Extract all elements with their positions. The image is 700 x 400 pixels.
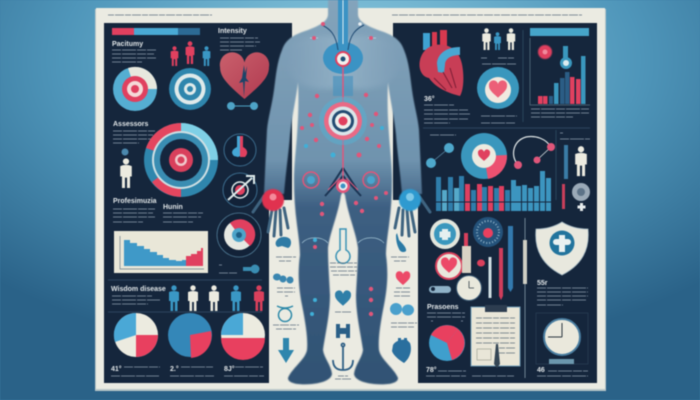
clipboard	[471, 305, 520, 368]
text block	[427, 313, 465, 321]
icon: blue anatomical heart	[392, 338, 411, 363]
pie chart one	[114, 313, 158, 357]
text block	[111, 367, 264, 376]
stethoscope loop	[514, 136, 555, 169]
panel: assessors	[113, 121, 257, 207]
text block	[220, 38, 260, 50]
caption	[277, 288, 295, 296]
icon: wall clock	[456, 276, 482, 300]
icon: radial dial	[473, 217, 503, 247]
panel: cream center icons	[330, 229, 357, 379]
fingers and thumbs	[253, 196, 430, 236]
caption	[391, 323, 417, 327]
icon: red heart	[396, 271, 410, 285]
icon: row of people	[169, 285, 264, 311]
shield	[536, 222, 588, 275]
stat: 55: 55r	[537, 280, 548, 287]
knee arcs	[302, 238, 384, 243]
icon: red pen	[499, 248, 503, 300]
target with heart and wedge	[461, 133, 507, 179]
heading: Profesimuzia: Profesimuzia	[113, 198, 157, 205]
icon: anchor	[333, 344, 353, 370]
icon: thermometer	[336, 229, 350, 263]
stat: 36: 36°	[424, 95, 435, 103]
icon: blue blobs	[390, 303, 414, 316]
thin medical bars	[562, 145, 568, 209]
caption	[335, 311, 351, 313]
stat: 78: 78°	[426, 366, 437, 374]
icon: blue heart	[335, 290, 351, 306]
target chart one	[113, 67, 157, 111]
body left half	[264, 0, 344, 384]
icon: gray dial	[572, 183, 590, 201]
body right half	[342, 0, 422, 384]
icon: down arrow	[278, 338, 294, 363]
human body figure	[253, 0, 430, 384]
caption	[335, 376, 351, 379]
icon: flask	[396, 233, 406, 252]
icon: small key	[243, 264, 260, 274]
red palm	[262, 189, 284, 211]
pie chart two	[168, 313, 212, 358]
abdomen target	[319, 97, 367, 145]
text block	[112, 50, 156, 62]
text block	[537, 371, 588, 376]
blue body markers	[304, 22, 384, 316]
icon: person and dot	[120, 148, 132, 188]
text block	[113, 209, 203, 222]
icon: ring	[277, 306, 293, 322]
stat: 2: 2.°	[170, 365, 179, 373]
caption	[391, 257, 409, 261]
central blue neck and chest	[310, 0, 376, 96]
text block	[531, 109, 589, 117]
connector with two dots	[227, 102, 258, 110]
icon: three people	[171, 41, 210, 66]
heading: Prasoens: Prasoens	[427, 304, 459, 311]
panel: right dark background	[393, 23, 597, 383]
icon: thermal shape in circle	[224, 134, 256, 166]
framed clock	[536, 313, 588, 364]
icon: bottle	[462, 233, 471, 273]
area bar chart	[114, 231, 208, 273]
heading: Wisdom disease: Wisdom disease	[111, 286, 166, 293]
heading: Hunin: Hunin	[163, 204, 183, 211]
bar chart	[530, 28, 590, 105]
chest target	[336, 52, 350, 66]
text block	[481, 116, 517, 123]
icon: blobs	[273, 274, 294, 284]
stat: 8: 8J°	[224, 365, 235, 373]
caption	[276, 257, 296, 261]
icon: long instrument	[523, 218, 527, 378]
icon: small key	[429, 286, 451, 293]
caption	[273, 325, 299, 329]
panel: left dark background	[104, 23, 292, 383]
groin and hip targets	[303, 172, 379, 193]
icon: red capsule	[477, 260, 485, 266]
panel: right middle network and bars	[423, 30, 590, 211]
progress bar	[112, 28, 200, 35]
text block	[560, 133, 590, 139]
text block	[424, 105, 470, 123]
target chart two	[169, 68, 211, 110]
panel: area chart section	[113, 198, 261, 274]
stat: 46: 46	[537, 367, 545, 374]
heading: Assessors: Assessors	[113, 121, 149, 128]
heading: Pacitumy: Pacitumy	[112, 41, 143, 48]
text block	[330, 263, 357, 275]
panel: upper right statistics	[419, 28, 590, 123]
large radial chart	[144, 123, 218, 197]
torso highlight	[287, 36, 399, 89]
icon: thin pen	[488, 257, 492, 298]
icon: three people	[482, 28, 515, 50]
text block	[481, 58, 516, 64]
stat: 41: 41°	[111, 365, 122, 373]
heading: Intensity: Intensity	[218, 28, 247, 35]
text block	[113, 131, 155, 143]
panel: wisdom disease	[108, 280, 265, 376]
red and blue body markers	[300, 22, 388, 316]
text block	[219, 265, 237, 273]
text block	[537, 288, 588, 305]
target with heart	[477, 67, 519, 109]
icon: heart ring	[436, 253, 462, 279]
panel: cream column icons left	[273, 237, 299, 363]
striped bar chart	[436, 171, 552, 211]
panel: lower right medical tools	[426, 217, 588, 378]
icon: arrow target circle	[223, 173, 257, 207]
icon: swirl circle	[217, 213, 261, 257]
panel: upper left statistics	[112, 28, 269, 111]
red central line	[342, 67, 344, 176]
text block	[112, 296, 160, 304]
icon: person	[575, 146, 587, 176]
network nodes	[426, 143, 454, 168]
pie chart three	[221, 313, 265, 360]
poster sheet	[95, 8, 606, 391]
lower abdomen branching lines	[325, 160, 361, 196]
icon: blue pen	[508, 226, 513, 292]
icon: cross in ring	[430, 219, 460, 249]
label	[430, 134, 456, 136]
text block	[426, 371, 514, 376]
icon: broken heart	[220, 52, 269, 99]
icon: puzzle	[336, 324, 350, 338]
pie chart	[429, 325, 465, 361]
caption	[394, 288, 410, 296]
panel: cream column icons right	[390, 233, 417, 363]
blue palm	[399, 189, 421, 211]
icon: plus	[578, 203, 586, 211]
icon: anatomical heart	[419, 30, 463, 96]
icon: organ	[276, 237, 291, 248]
